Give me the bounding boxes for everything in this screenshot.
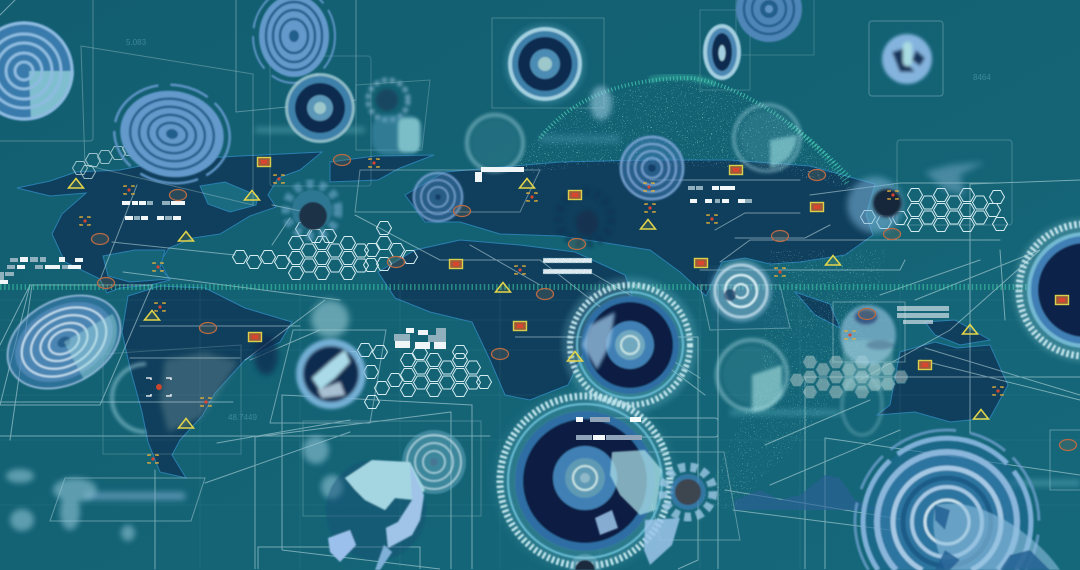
particle field: lower dome xyxy=(704,250,885,509)
ring: dark ring upper centre left xyxy=(285,73,355,143)
dash block: asia xyxy=(688,186,752,203)
globe: bottom centre right xyxy=(595,450,680,565)
label: top left: 5.083 xyxy=(126,38,147,47)
background grid lines xyxy=(0,280,1080,569)
globe: lower right xyxy=(933,504,1060,570)
ring: light globe east xyxy=(705,260,790,330)
gear: bottom centre right xyxy=(663,467,713,517)
globe: dark blur near brazil xyxy=(254,335,278,375)
data dash blocks xyxy=(0,167,949,440)
hex cluster: alaska xyxy=(72,142,138,178)
hexagon clusters xyxy=(72,142,1008,408)
dash block: east xyxy=(897,306,949,324)
ring: large bottom centre xyxy=(497,393,673,570)
map: Hudson Bay xyxy=(200,182,258,212)
particle arc xyxy=(540,77,850,185)
globe: small south east xyxy=(840,305,896,435)
map: South America pale interior xyxy=(160,352,238,432)
map: South America xyxy=(122,286,292,478)
dash block: north america xyxy=(122,201,185,220)
clouds: faded map bottom left xyxy=(6,436,343,541)
ring: north atlantic xyxy=(412,171,464,223)
ring: concentric left xyxy=(0,277,137,407)
ring: big ring right edge xyxy=(1013,218,1080,362)
green data line xyxy=(0,284,1080,290)
map: Africa xyxy=(378,240,632,400)
hex cluster: indonesia xyxy=(790,356,908,398)
map: Sumatra xyxy=(795,292,840,328)
blob: dark over west asia xyxy=(576,210,598,236)
dash block: africa xyxy=(394,328,446,349)
ring: faded ring right of dome xyxy=(734,105,800,171)
gear: faint dark over asia xyxy=(559,192,611,244)
ring: faded arc south america xyxy=(112,364,171,432)
map markers xyxy=(68,154,1076,463)
dash block: pacific xyxy=(0,257,83,284)
marker: rings xyxy=(92,154,1076,450)
map: North America xyxy=(17,152,322,293)
map: Greenland xyxy=(330,155,434,182)
dash block: mediterranean xyxy=(543,258,592,274)
small data labels xyxy=(126,38,991,422)
ring: top-left disc xyxy=(0,21,74,121)
ring: top spiral xyxy=(253,0,335,83)
map: Gulf of Mexico xyxy=(103,250,170,282)
marker: triangles xyxy=(68,178,988,428)
hex cluster: africa xyxy=(312,344,492,408)
blurred data bars xyxy=(85,127,1080,500)
dash block: bottom ring xyxy=(576,417,642,440)
label: south america: 48.7449 xyxy=(228,413,257,422)
ring: faded ring centre top xyxy=(467,115,523,171)
globe: asia east xyxy=(847,162,985,233)
particle field: upper dome xyxy=(516,78,850,189)
globe: small blur top centre xyxy=(590,86,612,120)
globe: faded gear top xyxy=(368,80,422,155)
marker: squares xyxy=(248,158,1068,370)
hex cluster: asia xyxy=(860,188,1008,232)
ring: bottom spiral xyxy=(402,430,466,494)
ring: dark ring top centre xyxy=(505,24,585,104)
mountain silhouette chart xyxy=(735,475,880,510)
world map xyxy=(17,152,1008,478)
ring: top right spiral xyxy=(736,0,802,42)
ring: marbled ring south america xyxy=(296,300,366,409)
ring: narrow oval top xyxy=(703,24,741,80)
ring: concentric upper-left xyxy=(106,76,238,192)
marker: brackets xyxy=(80,159,1003,463)
hex cluster: north america xyxy=(232,222,418,280)
ring: globe rings on asia xyxy=(619,135,685,201)
gear: north america xyxy=(286,184,338,236)
rings: large lower right xyxy=(855,430,1039,570)
ring: faded ring lower centre right xyxy=(717,340,787,412)
ring: big dark ring centre xyxy=(562,277,698,413)
label: top right: 8464 xyxy=(973,73,991,82)
map: Eurasia xyxy=(405,160,875,296)
green particle globe xyxy=(510,70,890,515)
map: New Guinea islands xyxy=(925,320,990,345)
dash block: arctic xyxy=(475,167,524,182)
map: Australia xyxy=(877,342,1008,422)
globe: bottom left xyxy=(326,460,426,570)
globe: boxed top right xyxy=(882,34,932,84)
